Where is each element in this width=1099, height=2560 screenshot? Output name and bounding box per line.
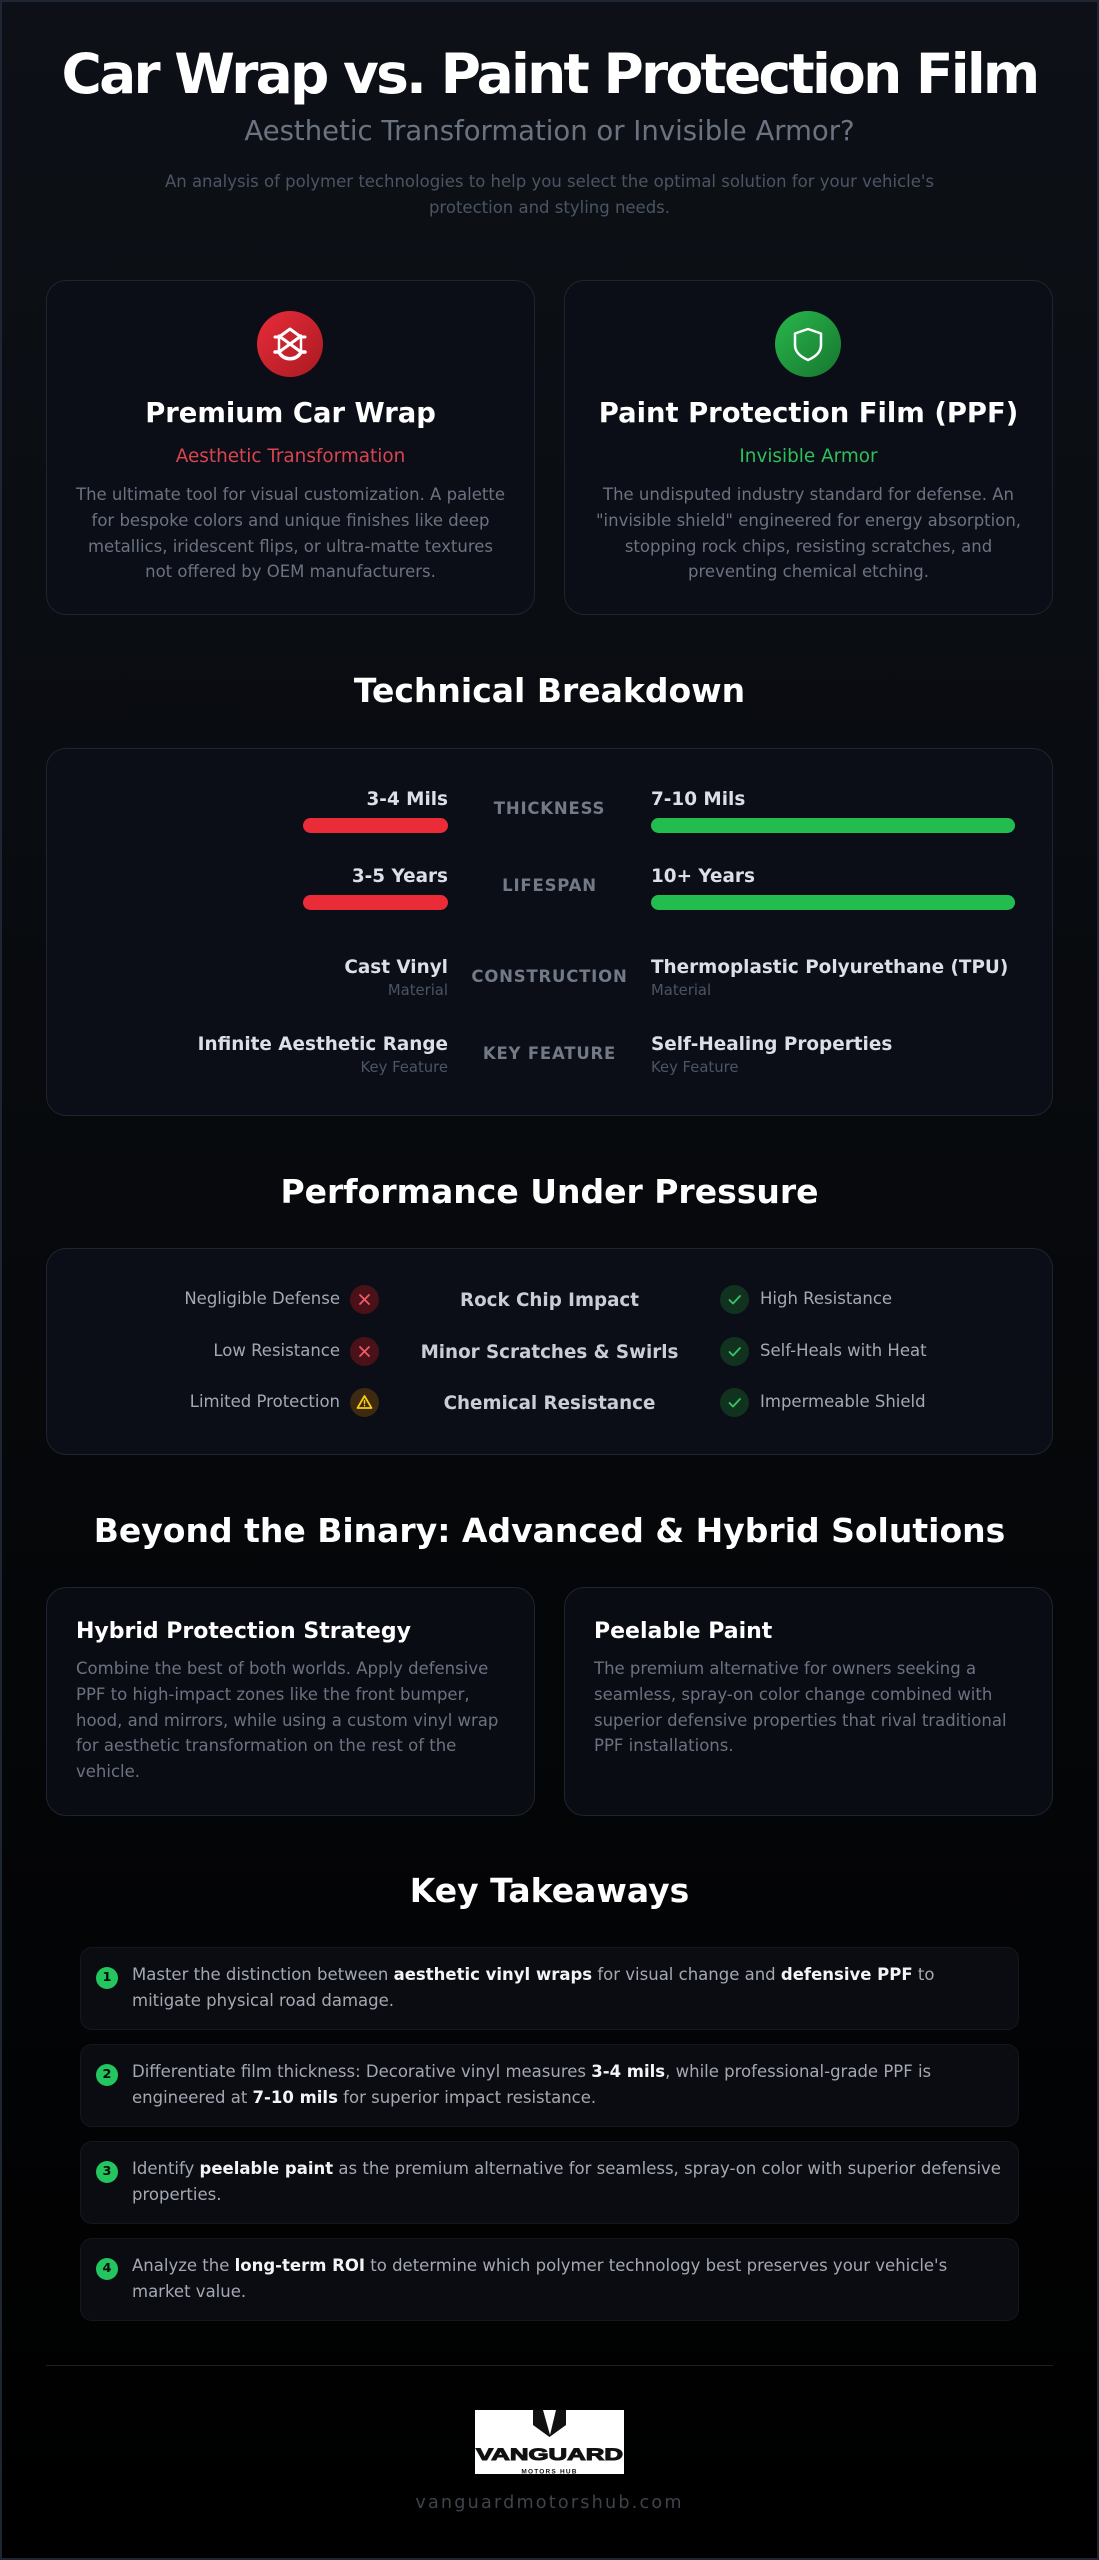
description: The undisputed industry standard for defense. An (603, 485, 1014, 504)
logo: VANGUARD (476, 2445, 623, 2464)
panel: peelable paint (564, 1587, 1053, 1816)
takeaway 2: Differentiate film thickness: Decorative vinyl measures 3-4 mils, while professional-grade PPF is (132, 2062, 931, 2081)
row: rock chip: Rock Chip Impact (460, 1290, 639, 1311)
title: Car Wrap vs. Paint Protection Film (62, 42, 1037, 106)
row: thickness: 7-10 Mils (651, 789, 745, 810)
description (76, 1659, 498, 1781)
description (594, 1659, 1007, 1755)
description: stopping rock chips, resisting scratches, and (625, 537, 992, 556)
row: chemical resistance (190, 1388, 926, 1417)
takeaway 1 (80, 1947, 1019, 2030)
takeaway 3: Identify peelable paint as the premium alternative for seamless, spray-on color with superior defensive (132, 2159, 1001, 2178)
takeaway 1: mitigate physical road damage. (132, 1991, 394, 2010)
description: PPF to high-impact zones like the front bumper, (76, 1685, 470, 1704)
row: key feature: Key Feature (651, 1059, 738, 1076)
row: thickness: 3-4 Mils (367, 789, 448, 810)
takeaway 3: 3 (103, 2164, 111, 2179)
panel: premium car wrap (46, 280, 535, 615)
description (76, 485, 505, 581)
row: minor scratches: Low Resistance (213, 1341, 340, 1360)
row: lifespan: 3-5 Years (352, 866, 448, 887)
panel: technical breakdown (46, 748, 1053, 1116)
row: thickness: THICKNESS (494, 799, 605, 818)
tagline: Invisible Armor (739, 446, 878, 467)
row: key feature: Infinite Aesthetic Range (198, 1034, 448, 1055)
row: minor scratches: Minor Scratches & Swirls (421, 1342, 678, 1363)
row: lifespan (303, 866, 1015, 910)
heading: Paint Protection Film (PPF) (599, 398, 1018, 429)
row: construction: Cast Vinyl (344, 957, 448, 978)
takeaway 2 (80, 2044, 1019, 2127)
row: key feature: Self-Healing Properties (651, 1034, 892, 1055)
row: rock chip (184, 1285, 892, 1314)
takeaway 3: properties. (132, 2185, 221, 2204)
heading: performance under pressure: Performance Under Pressure (280, 1172, 819, 1211)
row: rock chip: Negligible Defense (184, 1289, 340, 1308)
row: minor scratches (213, 1337, 927, 1366)
description: not offered by OEM manufacturers. (145, 562, 436, 581)
header (62, 42, 1037, 217)
heading: technical breakdown: Technical Breakdown (354, 671, 745, 710)
description: Combine the best of both worlds. Apply defensive (76, 1659, 488, 1678)
description: seamless, spray-on color change combined with (594, 1685, 992, 1704)
description: for aesthetic transformation on the rest of the (76, 1736, 456, 1755)
description: PPF installations. (594, 1736, 734, 1755)
icon: shield (775, 311, 841, 377)
description: "invisible shield" engineered for energy absorption, (596, 511, 1021, 530)
row: lifespan: 10+ Years (651, 866, 755, 887)
panel: paint protection film (564, 280, 1053, 615)
row: key feature: Key Feature (361, 1059, 448, 1076)
takeaway 4: market value. (132, 2282, 246, 2301)
website url: vanguardmotorshub.com (415, 2493, 684, 2513)
heading: key takeaways: Key Takeaways (410, 1871, 689, 1910)
row: thickness (303, 789, 1015, 833)
icon: cross (350, 1285, 379, 1314)
subtitle: Aesthetic Transformation or Invisible Armor? (244, 115, 855, 147)
row: construction: CONSTRUCTION (471, 967, 628, 986)
description: preventing chemical etching. (688, 562, 929, 581)
description: The premium alternative for owners seeking a (594, 1659, 976, 1678)
icon: wrap (257, 311, 323, 377)
tagline: Aesthetic Transformation (176, 446, 405, 467)
takeaway 4 (80, 2238, 1019, 2321)
heading: Premium Car Wrap (145, 398, 436, 429)
description (596, 485, 1021, 581)
panel: hybrid protection strategy (46, 1587, 535, 1816)
row: key feature: KEY FEATURE (483, 1044, 616, 1063)
row: construction: Material (651, 982, 711, 999)
intro text (165, 172, 934, 217)
row: lifespan: LIFESPAN (502, 876, 597, 895)
description: for bespoke colors and unique finishes like deep (92, 511, 489, 530)
heading: beyond the binary: Beyond the Binary: Advanced & Hybrid Solutions (94, 1511, 1005, 1550)
row: chemical resistance: Impermeable Shield (760, 1392, 926, 1411)
icon: warning (350, 1388, 379, 1417)
logo (475, 2410, 624, 2474)
takeaway 4: Analyze the long-term ROI to determine which polymer technology best preserves your vehicle's (132, 2256, 947, 2275)
row: key feature (198, 1034, 892, 1076)
description: metallics, iridescent flips, or ultra-matte textures (88, 537, 493, 556)
heading: Peelable Paint (594, 1619, 772, 1644)
row: construction (344, 957, 1008, 999)
takeaway 2: 2 (103, 2067, 111, 2082)
row: rock chip: High Resistance (760, 1289, 892, 1308)
intro text: protection and styling needs. (429, 198, 670, 217)
takeaway 1: Master the distinction between aesthetic vinyl wraps for visual change and defensive PPF to (132, 1965, 934, 1984)
icon: check (720, 1285, 749, 1314)
row: chemical resistance: Limited Protection (190, 1392, 340, 1411)
takeaway 2: engineered at 7-10 mils for superior impact resistance. (132, 2088, 596, 2107)
row: construction: Thermoplastic Polyurethane (TPU) (651, 957, 1008, 978)
row: chemical resistance: Chemical Resistance (444, 1393, 655, 1414)
description: hood, and mirrors, while using a custom vinyl wrap (76, 1711, 498, 1730)
description: vehicle. (76, 1762, 140, 1781)
row: construction: Material (388, 982, 448, 999)
heading: Hybrid Protection Strategy (76, 1619, 411, 1644)
panel: performance (46, 1248, 1053, 1455)
description: The ultimate tool for visual customization. A palette (76, 485, 505, 504)
intro text: An analysis of polymer technologies to help you select the optimal solution for your vehicle's (165, 172, 934, 191)
icon: check (720, 1388, 749, 1417)
row: minor scratches: Self-Heals with Heat (760, 1341, 927, 1360)
icon: cross (350, 1337, 379, 1366)
takeaway 1: 1 (103, 1970, 111, 1985)
takeaway 4: 4 (103, 2261, 111, 2276)
takeaway 3 (80, 2141, 1019, 2224)
icon: check (720, 1337, 749, 1366)
description: superior defensive properties that rival traditional (594, 1711, 1007, 1730)
